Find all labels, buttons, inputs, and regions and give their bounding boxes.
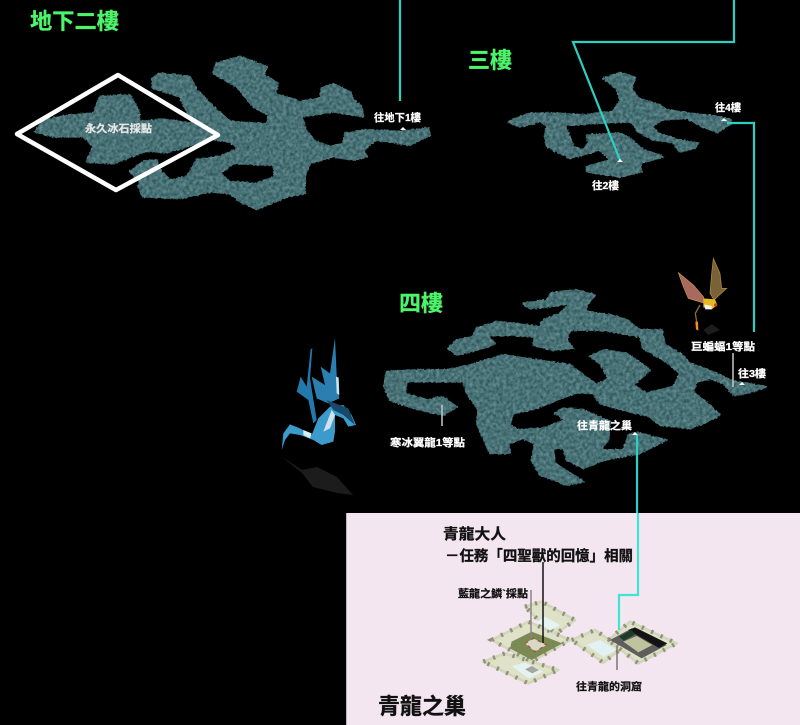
callout lines on floor 4 [442, 353, 733, 426]
icon: blue dragon [282, 338, 356, 450]
title: floor 4: 四樓 [399, 291, 443, 316]
callout lines [531, 562, 617, 670]
label: scale gathering: 藍龍之鱗`採點 [458, 587, 529, 600]
exit markers [400, 118, 745, 435]
panel: dragon nest [346, 513, 800, 725]
title: basement 2: 地下二樓 [30, 9, 119, 34]
map: floor 4 [384, 290, 767, 485]
map: basement 2 floor [35, 57, 430, 209]
label: ice stone point: 永久冰石採點 [85, 122, 153, 135]
label: to 3F: 往3樓 [738, 367, 767, 380]
label: to dragon nest: 往青龍之巢 [577, 419, 633, 432]
icon: dragon shadow [282, 457, 353, 495]
connector: cyan route [619, 513, 638, 630]
heading: quest note: －任務「四聖獸的回憶」相關 [445, 547, 633, 565]
title: floor 3: 三樓 [468, 48, 512, 73]
label: to dragon cave: 往青龍的洞窟 [576, 680, 642, 693]
label: giant bat: 巨蝙蝠1等點 [691, 340, 756, 353]
label: to B1: 往地下1樓 [374, 111, 421, 124]
connector lines [400, 0, 754, 513]
title: dragon nest: 青龍之巢 [378, 694, 466, 719]
map: dragon nest terrain [483, 602, 677, 683]
map: floor 3 [508, 73, 732, 177]
icon: giant bat [678, 258, 727, 335]
label: to 2F: 往2樓 [592, 179, 619, 192]
label: to 4F: 往4樓 [715, 101, 741, 114]
highlighted zone diamond [17, 75, 218, 190]
gate structure [610, 627, 667, 658]
label: ice wyvern: 寒冰翼龍1等點 [390, 436, 466, 449]
heading: lord blue dragon: 青龍大人 [443, 525, 506, 543]
